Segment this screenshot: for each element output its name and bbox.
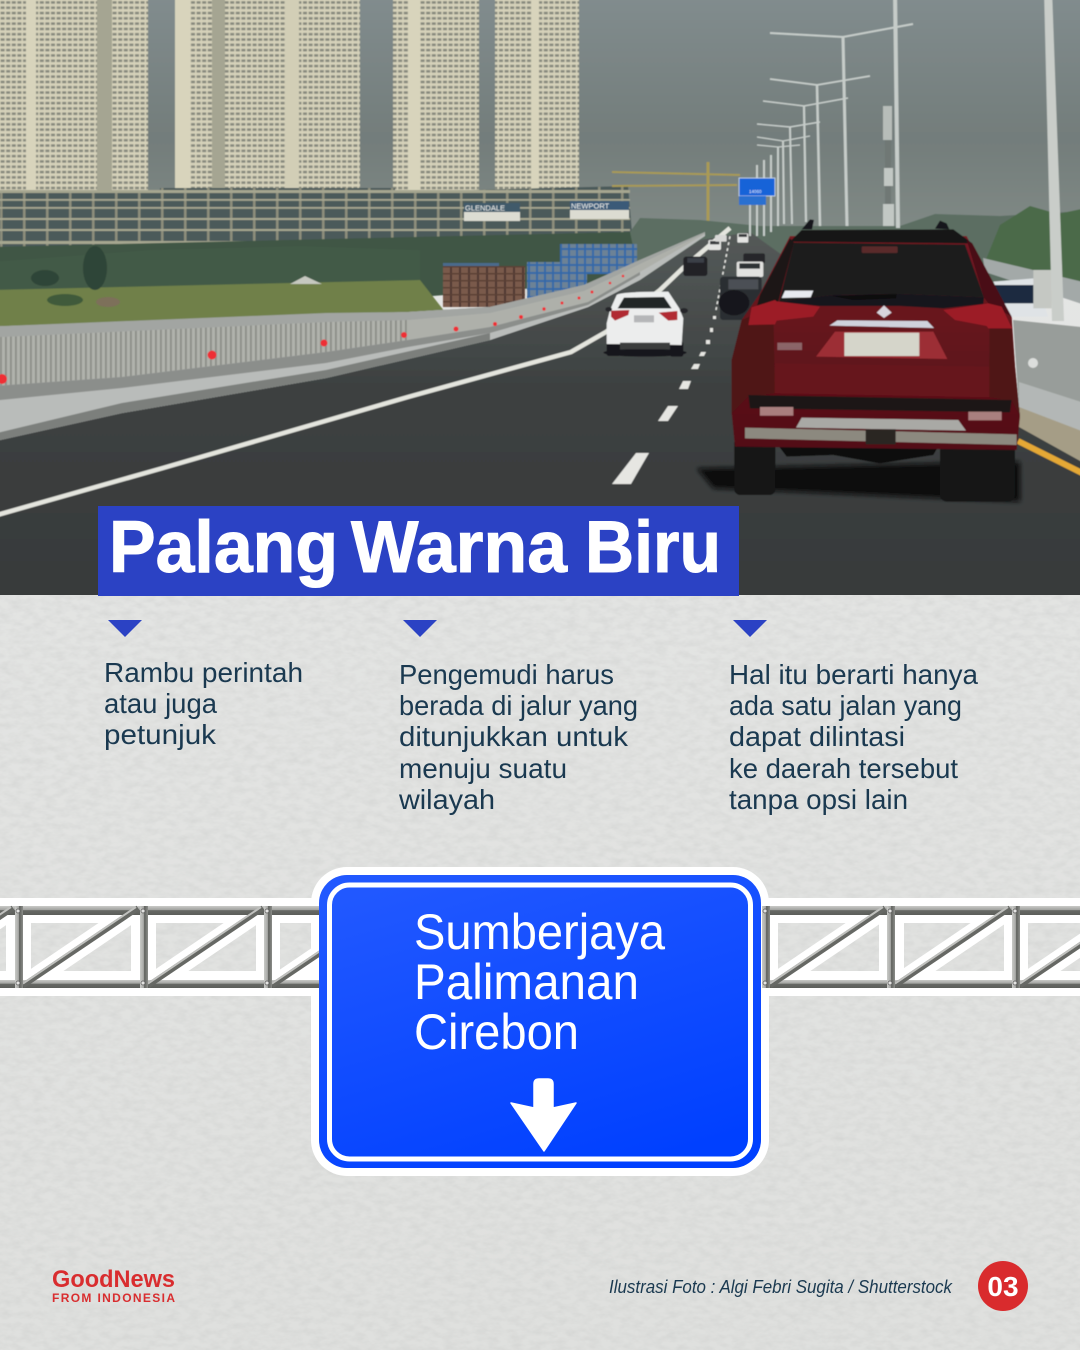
- ground shadow: [697, 462, 1020, 502]
- column 2: text: [398, 620, 638, 815]
- column 2: text: berada di jalur yang: [399, 690, 638, 721]
- GoodNews logo: FROM INDONESIA: [52, 1291, 175, 1305]
- column 3: text: ke daerah tersebut: [729, 753, 958, 784]
- far right barrier: [983, 258, 1080, 310]
- road surface: [0, 232, 1080, 620]
- window trim: [777, 294, 984, 308]
- sign down arrow: [511, 1079, 576, 1151]
- column 3: text: [729, 620, 978, 815]
- photo credit: Ilustrasi Foto : Algi Febri Sugita / Shutterstock: [609, 1277, 953, 1297]
- lamp poles: [750, 0, 913, 236]
- left pillar: [757, 238, 794, 307]
- plate recess: [816, 332, 947, 359]
- chrome bar: [829, 320, 934, 328]
- trees and field: [0, 232, 640, 330]
- telecom tower: [883, 106, 894, 226]
- GoodNews logo: GoodNews: [52, 1266, 175, 1293]
- truss white outline: [0, 898, 1080, 996]
- side panels: [732, 307, 1020, 417]
- background towers: [0, 0, 579, 192]
- steel gantry truss: [0, 898, 1080, 996]
- construction podium: NEWPORT: [571, 202, 610, 210]
- column 2: text: menuju suatu: [399, 753, 567, 784]
- rear tube bar: [745, 428, 1017, 445]
- distant traffic: [683, 233, 765, 320]
- sign blue plate: [319, 875, 761, 1168]
- lower tailgate panel: [775, 363, 989, 397]
- side mirror: [719, 290, 749, 315]
- truss steel members: [0, 906, 1080, 988]
- sign destinations: Cirebon: [414, 1004, 579, 1060]
- column 2: text: Pengemudi harus: [399, 659, 614, 690]
- road photo: [0, 0, 1080, 595]
- sign destinations: [414, 904, 665, 1060]
- under body: [777, 443, 940, 463]
- sign destinations: Sumberjaya: [414, 904, 665, 960]
- column 1: text: atau juga: [104, 688, 217, 719]
- tail lights: [748, 300, 1012, 328]
- red SUV: [697, 219, 1020, 502]
- rear window: [779, 243, 984, 302]
- number plate: [844, 333, 919, 356]
- roof rails: [802, 219, 949, 229]
- right trees: [985, 205, 1080, 285]
- tyres: [734, 437, 1015, 502]
- silver skid: [796, 418, 966, 431]
- construction podium: GLENDALE: [465, 204, 505, 212]
- construction podium: [0, 186, 632, 247]
- car body: [732, 236, 1020, 450]
- right white car background: [993, 270, 1052, 317]
- barrier reflectors: [0, 275, 624, 384]
- right concrete barrier: [1013, 320, 1080, 472]
- marker triangle: [403, 620, 437, 637]
- column 2: text: wilayah: [398, 784, 495, 815]
- column 1: text: petunjuk: [104, 719, 217, 750]
- white car: [603, 292, 688, 357]
- road edge line: [0, 228, 730, 517]
- overhead blue road sign: [739, 178, 775, 205]
- wiper: [832, 294, 897, 300]
- far hills: [630, 210, 1080, 290]
- right pillar: [967, 240, 1012, 317]
- site scaffolding: [443, 244, 637, 307]
- column 3: text: dapat dilintasi: [729, 721, 905, 752]
- title banner: Palang: [109, 507, 338, 588]
- column 3: text: Hal itu berarti hanya: [729, 659, 978, 690]
- page number badge: 03: [987, 1271, 1019, 1302]
- right lane marking: [1018, 441, 1080, 477]
- sign inner border: [330, 885, 750, 1159]
- cranes: [612, 162, 740, 225]
- page number badge: [978, 1261, 1028, 1311]
- column 1: text: [104, 620, 303, 750]
- overhead blue road sign: 14060: [749, 189, 762, 194]
- marker triangle: [733, 620, 767, 637]
- blue direction sign: [319, 875, 761, 1168]
- GoodNews logo: [52, 1266, 175, 1305]
- sign destinations: Palimanan: [414, 954, 639, 1010]
- rear reflectors: [760, 407, 1002, 420]
- title banner: Warna: [351, 507, 568, 588]
- column 3: text: ada satu jalan yang: [729, 690, 962, 721]
- column 1: text: Rambu perintah: [104, 657, 303, 688]
- high stop lamp: [862, 246, 898, 253]
- title banner: [98, 506, 739, 596]
- badge: [877, 305, 892, 318]
- window sticker: [782, 291, 813, 298]
- column 3: text: tanpa opsi lain: [729, 784, 908, 815]
- spoiler: [790, 229, 972, 243]
- marker triangle: [108, 620, 142, 637]
- model badge: [777, 343, 802, 350]
- lane dashes: [612, 236, 730, 484]
- right street pole: [1044, 0, 1064, 321]
- tow hitch: [866, 429, 896, 444]
- title banner: Biru: [585, 507, 721, 588]
- column 2: text: ditunjukkan untuk: [399, 721, 629, 752]
- sky: [0, 0, 1080, 270]
- bumper strip: [748, 395, 1012, 412]
- sign white halo: [311, 867, 769, 1176]
- left concrete barrier: [0, 232, 705, 445]
